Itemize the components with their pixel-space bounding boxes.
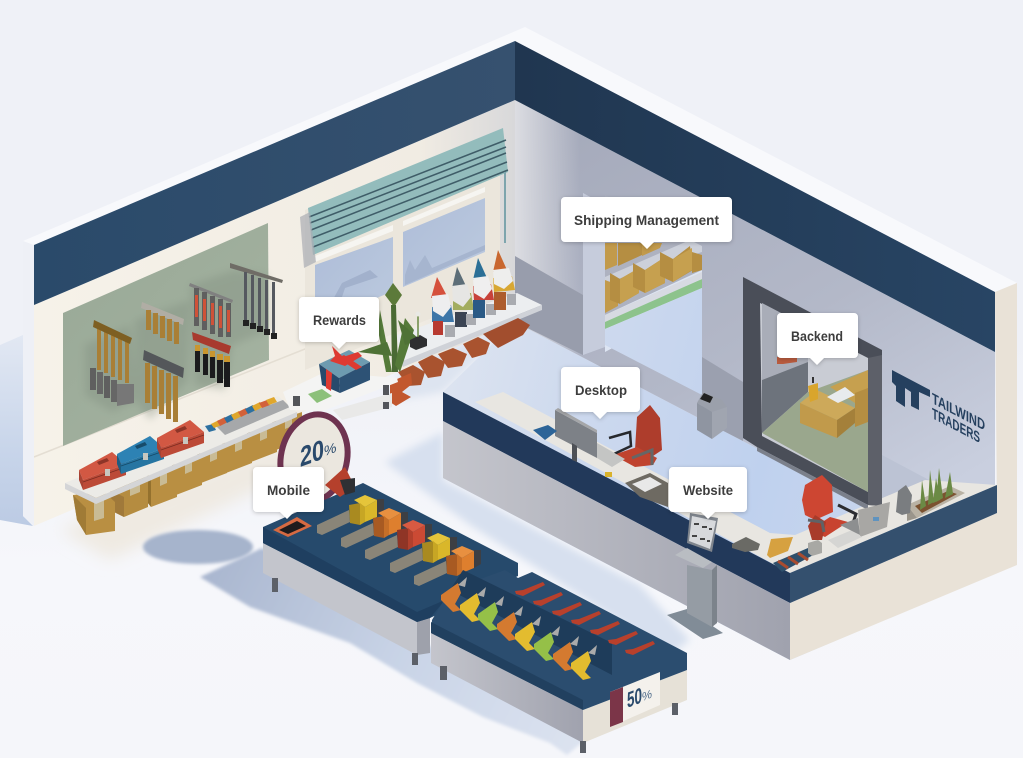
counter grey front — [443, 421, 790, 660]
axes — [143, 350, 184, 422]
display table one — [263, 467, 518, 665]
right wall — [515, 100, 995, 573]
wainscot right wall — [702, 357, 743, 441]
pegboard — [63, 223, 269, 446]
50% sign: 50 — [627, 682, 642, 713]
logo: TRADERS — [932, 406, 980, 447]
small planter — [896, 468, 965, 521]
corner glow on right wall — [515, 100, 580, 356]
doorway — [743, 277, 882, 510]
pegboard tools — [85, 263, 283, 422]
20% sign — [273, 408, 355, 508]
callout: Website: Website — [683, 483, 733, 498]
chainsaw red sign — [325, 467, 355, 497]
20% sign: % — [324, 440, 337, 460]
desk items — [732, 537, 822, 572]
parcels — [800, 370, 868, 438]
red handled hammers — [189, 283, 233, 337]
trash bin — [697, 392, 727, 439]
callout: Desktop — [561, 367, 640, 419]
counter top — [475, 392, 997, 573]
left wall blue band — [34, 41, 515, 305]
pipe wrenches — [515, 582, 655, 655]
right wall end face — [790, 283, 1017, 660]
potted plant — [358, 283, 427, 372]
drills — [441, 577, 597, 680]
right wall navy band — [515, 41, 995, 352]
callout: Website — [669, 467, 747, 519]
counter right navy band — [790, 485, 997, 603]
toolbox red — [79, 452, 126, 490]
chainsaws — [317, 495, 481, 586]
shipping room opening — [605, 195, 702, 395]
callout: Mobile: Mobile — [267, 483, 310, 498]
chair back desk — [802, 475, 856, 540]
gift box — [319, 346, 370, 393]
tablet — [273, 517, 312, 537]
rewards table — [283, 346, 398, 420]
50% sign: % — [642, 687, 652, 704]
mallets — [141, 302, 184, 344]
printer — [625, 473, 668, 507]
callout: Backend: Backend — [791, 329, 843, 344]
blind pull rod — [504, 172, 506, 243]
callout: Rewards — [299, 297, 379, 349]
laptop and papers — [828, 502, 890, 548]
display table two — [431, 570, 687, 753]
wall end face — [23, 241, 34, 526]
toolbox blue — [117, 436, 164, 474]
gnome shelf — [397, 293, 542, 367]
monitor and keyboard — [533, 408, 625, 477]
top edge of walls — [23, 27, 1017, 292]
window — [300, 128, 508, 370]
gnome planters — [390, 318, 530, 406]
screwdriver rack — [205, 397, 290, 435]
logo: TAILWIND — [932, 391, 985, 434]
left wall — [34, 100, 515, 526]
boxes below shelf — [73, 412, 302, 535]
partition pillar — [515, 193, 605, 355]
floor shadows — [0, 322, 690, 755]
callout: Backend — [777, 313, 858, 365]
black handled hammers — [192, 332, 231, 387]
20% sign: 20 — [300, 434, 324, 474]
divider — [450, 570, 612, 675]
callout: Shipping Management — [561, 197, 732, 249]
wainscot door wall — [882, 455, 995, 573]
green notebook — [308, 389, 332, 403]
callout: Shipping Management: Shipping Management — [574, 213, 719, 228]
callout: Rewards: Rewards — [313, 313, 366, 328]
gnomes — [431, 250, 516, 337]
window blinds — [300, 128, 508, 268]
tool shelf — [65, 396, 297, 498]
logo — [892, 370, 985, 447]
chair desktop — [609, 405, 662, 467]
sledgehammers — [90, 320, 134, 406]
shelf boxes — [605, 243, 702, 313]
store floor — [443, 322, 995, 660]
callout: Desktop: Desktop — [575, 383, 627, 398]
callout: Mobile — [253, 467, 324, 519]
toolbox red 2 — [157, 420, 204, 458]
50% sign — [610, 672, 660, 727]
counter front navy band — [443, 392, 790, 603]
grey hammers — [230, 263, 283, 339]
kiosk — [667, 513, 723, 639]
